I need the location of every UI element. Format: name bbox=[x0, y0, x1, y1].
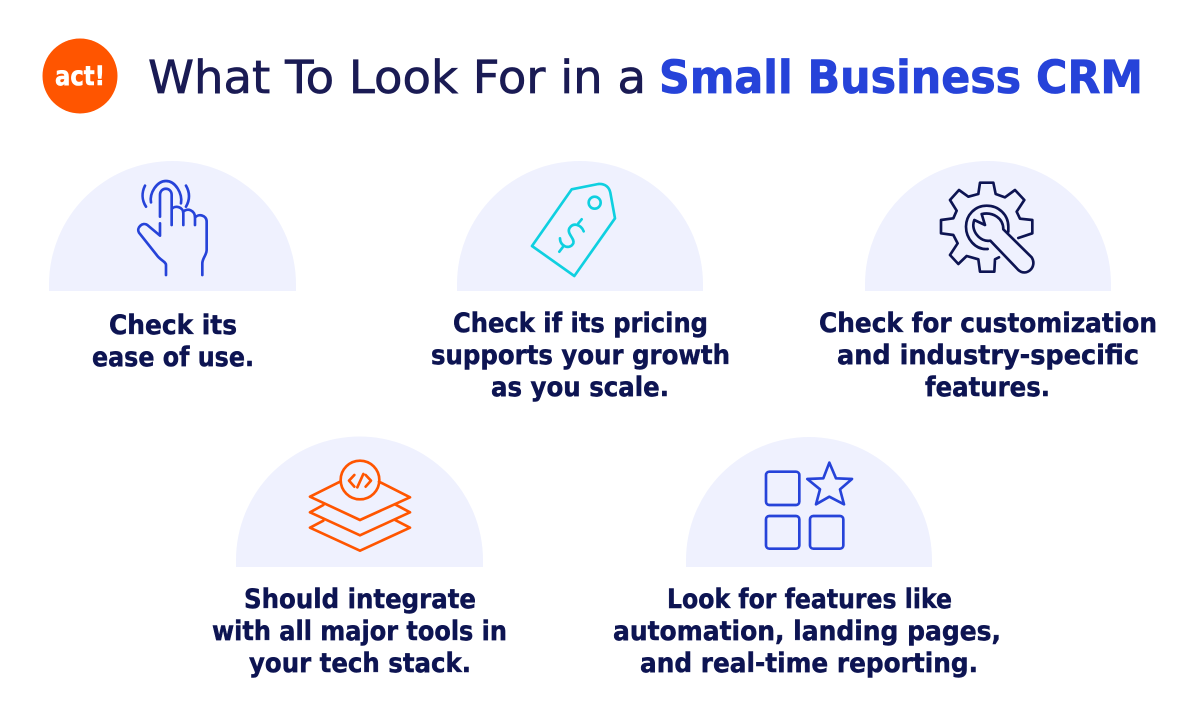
semicircle background bbox=[236, 436, 483, 567]
text: features: Look for features like bbox=[667, 584, 952, 615]
semicircle background bbox=[49, 161, 296, 291]
text: integrations: with all major tools in bbox=[212, 616, 507, 647]
logo: act!: act! bbox=[55, 61, 105, 92]
icon: gear and wrench bbox=[941, 183, 1033, 272]
icon: grid and star bbox=[766, 463, 852, 549]
text: pricing: as you scale. bbox=[491, 372, 669, 403]
semicircle background bbox=[865, 161, 1111, 291]
text: integrations: your tech stack. bbox=[249, 648, 471, 679]
title bbox=[148, 51, 1143, 104]
semicircle background bbox=[457, 161, 703, 291]
text: pricing: supports your growth bbox=[431, 340, 730, 371]
semicircle background bbox=[686, 437, 932, 567]
logo: act! bbox=[42, 38, 118, 114]
text: features: automation, landing pages, bbox=[613, 616, 1001, 647]
panel: ease of use bbox=[49, 161, 296, 373]
text: customization bbox=[819, 308, 1157, 403]
text: features: and real-time reporting. bbox=[640, 648, 978, 679]
text: check ease of use: Check its bbox=[109, 310, 237, 341]
icon: tapping hand bbox=[138, 181, 207, 275]
text: check ease of use bbox=[92, 310, 254, 373]
text: customization: and industry-specific bbox=[837, 340, 1139, 371]
text: customization: Check for customization bbox=[819, 308, 1157, 339]
icon: price tag bbox=[532, 184, 615, 276]
text: check ease of use: ease of use. bbox=[92, 342, 254, 373]
icon: code layers bbox=[310, 461, 410, 551]
text: integrations bbox=[212, 584, 507, 679]
panel: features bbox=[613, 437, 1001, 679]
panel: integrations bbox=[212, 436, 507, 679]
text: pricing bbox=[431, 308, 730, 403]
text: integrations: Should integrate bbox=[244, 584, 476, 615]
text: features bbox=[613, 584, 1001, 679]
title: Small Business CRM bbox=[659, 51, 1143, 104]
text: customization: features. bbox=[925, 372, 1050, 403]
panel: customization bbox=[819, 161, 1157, 403]
title: What To Look For in a bbox=[148, 51, 646, 104]
text: pricing: Check if its pricing bbox=[453, 308, 708, 339]
panel: pricing bbox=[431, 161, 730, 403]
